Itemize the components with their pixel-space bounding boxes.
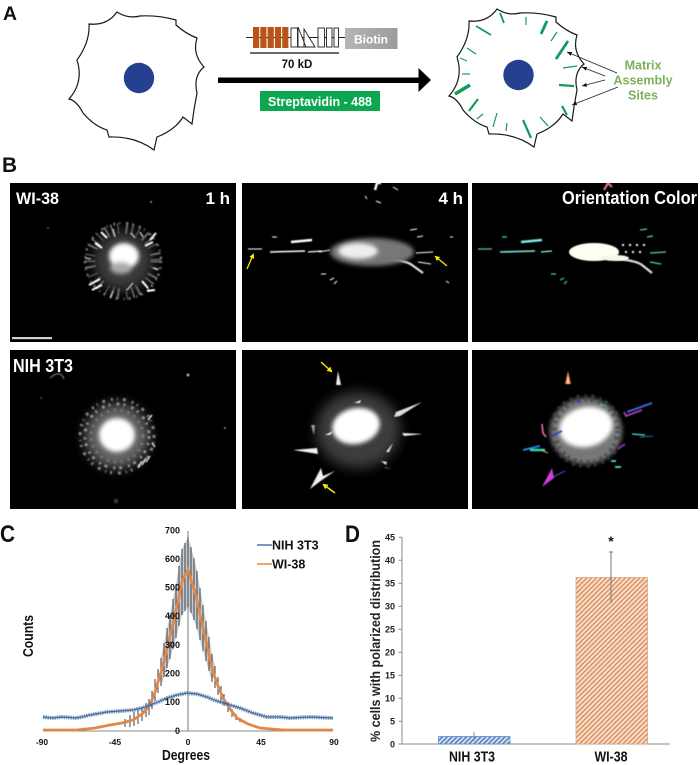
callout: matrix assembly sites: Assembly: [613, 74, 673, 88]
micrograph: WI-38 1 h: [10, 183, 236, 342]
legend: WI-38: [272, 558, 305, 572]
streptavidin label: [260, 91, 380, 111]
label WI-38: WI-38: [16, 189, 59, 208]
fibronectin construct diagram: Biotin: [354, 32, 388, 46]
cell before labelling: [69, 12, 204, 150]
panel D: bar chart: [345, 521, 670, 765]
y axis title: % cells with polarized distribution: [367, 540, 383, 742]
NIH 3T3 curve: [43, 693, 333, 718]
y axis title: Counts: [21, 615, 37, 657]
x tick labels: 90: [329, 737, 339, 747]
streptavidin label: Streptavidin - 488: [268, 94, 372, 109]
y tick labels: 15: [385, 670, 395, 680]
bar WI-38: [576, 552, 648, 744]
y tick labels: 700: [165, 526, 180, 536]
label NIH 3T3: NIH 3T3: [13, 356, 73, 376]
y tick labels: 35: [385, 578, 395, 588]
y tick labels: 40: [385, 556, 395, 566]
legend: NIH 3T3: [272, 538, 319, 552]
y axis line: [187, 531, 189, 731]
yellow arrows: [321, 362, 335, 493]
axes: [398, 537, 670, 744]
x tick labels: 45: [256, 737, 266, 747]
yellow arrows: [247, 255, 447, 269]
y tick labels: 300: [165, 640, 180, 650]
legend: [257, 538, 319, 572]
y tick labels: 5: [390, 716, 395, 726]
fibronectin construct diagram: [246, 27, 398, 71]
x tick labels: 0: [186, 737, 191, 747]
y tick labels: [385, 532, 395, 750]
x tick labels: [36, 737, 339, 747]
label 1 h: 1 h: [205, 189, 230, 208]
micrograph: NIH 3T3 orientation color: [472, 350, 698, 509]
x tick labels: -90: [36, 737, 48, 747]
x tick labels: -45: [109, 737, 121, 747]
y tick labels: 25: [385, 624, 395, 634]
label 4 h: 4 h: [438, 189, 463, 208]
panel letter A: A: [3, 4, 17, 25]
cell with matrix assembly sites: [449, 9, 584, 147]
callout: matrix assembly sites: Matrix: [625, 58, 661, 72]
y tick labels: 200: [165, 668, 180, 678]
panel B: micrographs: [2, 154, 698, 509]
y tick labels: 400: [165, 611, 180, 621]
micrograph: WI-38 4 h: [242, 183, 468, 342]
panel letter C: C: [0, 521, 15, 548]
y tick labels: 30: [385, 602, 395, 612]
y tick labels: 500: [165, 582, 180, 592]
panel letter B: B: [2, 154, 17, 177]
y tick labels: 0: [390, 740, 395, 750]
y tick labels: [165, 526, 180, 736]
callout: matrix assembly sites: Sites: [628, 88, 658, 102]
bar NIH 3T3: [438, 732, 510, 744]
panel C: orientation histogram: [0, 521, 339, 764]
category labels: [449, 750, 628, 765]
callout arrows: [567, 52, 618, 105]
micrograph: NIH 3T3 4 h: [242, 350, 468, 509]
WI-38 curve: [43, 570, 333, 730]
y tick labels: 45: [385, 532, 395, 542]
x axis title: Degrees: [162, 748, 210, 764]
WI-38 error shading: [161, 537, 215, 686]
micrograph: WI-38 orientation color: [472, 183, 698, 342]
significance star: *: [608, 533, 614, 549]
micrograph: NIH 3T3 1 h: [10, 350, 236, 509]
y tick labels: 20: [385, 648, 395, 658]
scale bar: [12, 337, 52, 339]
WI-38 error bars: [125, 537, 240, 727]
x axis line: [43, 730, 333, 732]
y tick labels: 10: [385, 694, 395, 704]
process arrow: [218, 68, 431, 92]
y tick labels: 600: [165, 554, 180, 564]
fibronectin construct diagram: 70 kD: [282, 59, 312, 71]
y tick labels: 0: [175, 726, 180, 736]
y tick labels: 100: [165, 697, 180, 707]
panel letter D: D: [345, 521, 360, 548]
panel A: labelling schematic: [3, 4, 673, 150]
